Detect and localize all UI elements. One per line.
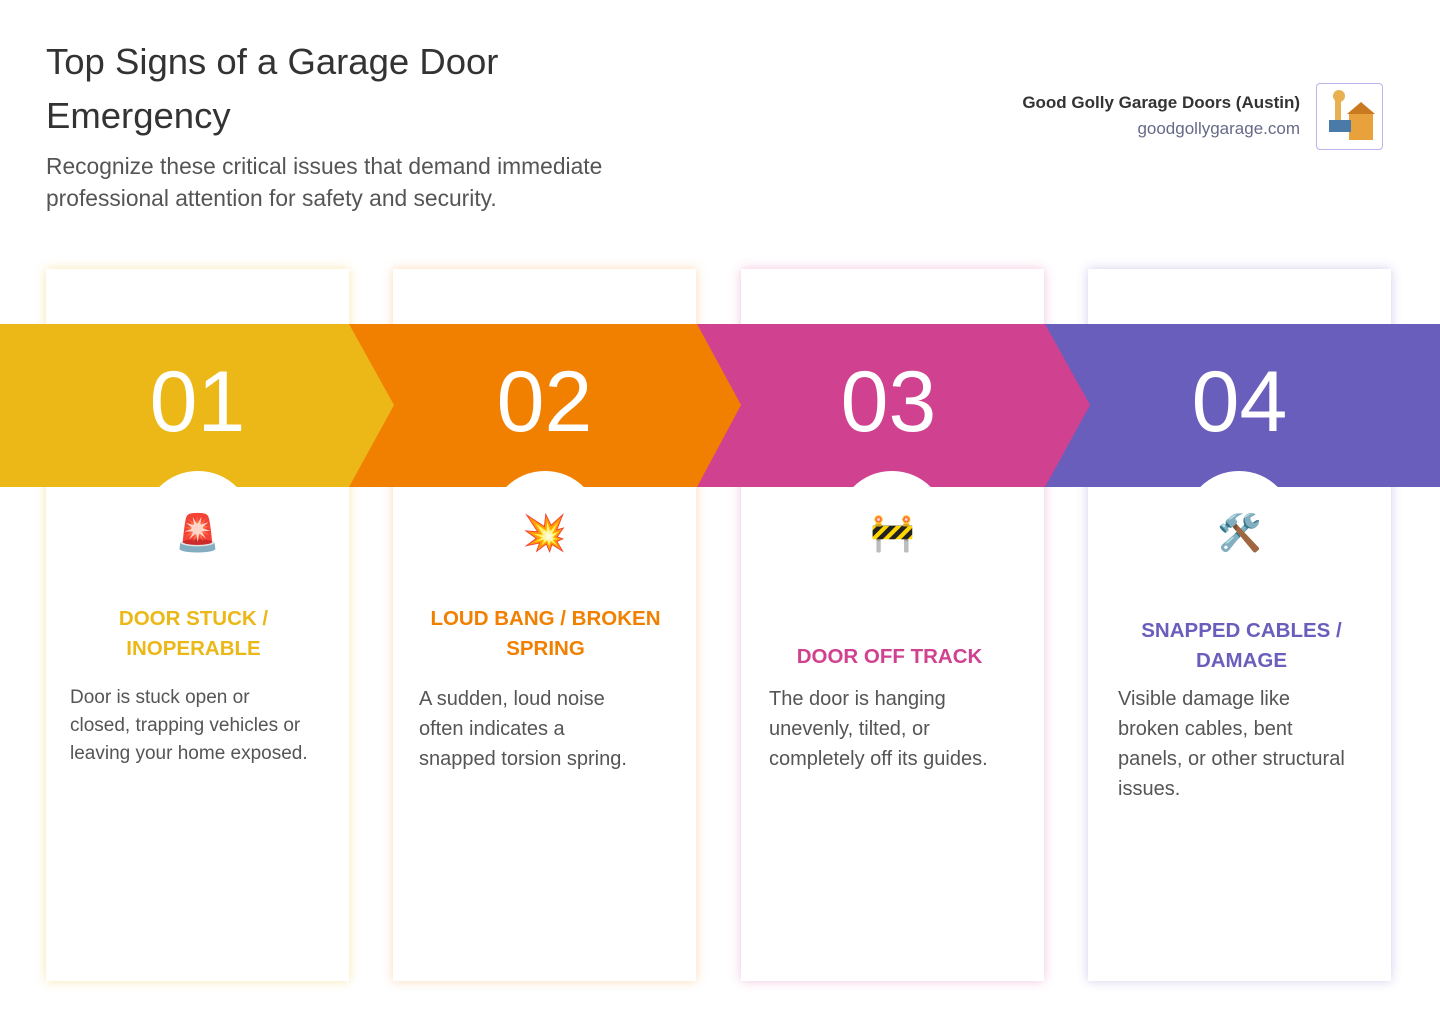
number 04: 04 bbox=[1192, 354, 1287, 450]
card 2 bbox=[393, 269, 696, 981]
card 1 title: DOOR STUCK / bbox=[119, 607, 268, 630]
card 3 bbox=[741, 269, 1044, 981]
card 4 text: broken cables, bent bbox=[1118, 718, 1293, 740]
card 1 text: leaving your home exposed. bbox=[70, 743, 308, 764]
title: Top Signs of a Garage Door Emergency bbox=[46, 41, 498, 136]
brand bbox=[1022, 93, 1300, 138]
card 2 title bbox=[430, 607, 661, 660]
card 4 title: SNAPPED CABLES / bbox=[1141, 619, 1342, 642]
icon: tools: 🛠️ bbox=[1217, 512, 1262, 553]
icon: barrier: 🚧 bbox=[870, 512, 915, 553]
card 3 title: DOOR OFF TRACK bbox=[797, 645, 982, 668]
card 4 text: panels, or other structural bbox=[1118, 748, 1345, 770]
card 2 text: snapped torsion spring. bbox=[419, 748, 627, 770]
circle 1 bbox=[143, 471, 253, 581]
card 1 text bbox=[70, 687, 308, 764]
card 3 text: unevenly, tilted, or bbox=[769, 718, 930, 740]
subtitle: Recognize these critical issues that demand immediate bbox=[46, 153, 602, 179]
card 1 text: closed, trapping vehicles or bbox=[70, 715, 300, 736]
circle 2 bbox=[490, 471, 600, 581]
icon: siren: 🚨 bbox=[175, 512, 220, 553]
card 4 text bbox=[1118, 688, 1345, 800]
number 03: 03 bbox=[841, 354, 936, 450]
card 1 title: INOPERABLE bbox=[126, 637, 261, 660]
circle 3 bbox=[837, 471, 947, 581]
card 2 text bbox=[419, 688, 627, 770]
card 1 title bbox=[119, 607, 268, 660]
card 2 title: SPRING bbox=[506, 637, 585, 660]
number 01: 01 bbox=[150, 354, 245, 450]
card 1 bbox=[46, 269, 349, 981]
card 2 text: often indicates a bbox=[419, 718, 565, 740]
card 3 text bbox=[769, 688, 988, 770]
card 3 text: The door is hanging bbox=[769, 688, 946, 710]
logo bbox=[1316, 83, 1383, 150]
arrow band bbox=[0, 324, 1440, 487]
card 4 title: DAMAGE bbox=[1196, 649, 1287, 672]
brand: goodgollygarage.com bbox=[1137, 119, 1300, 138]
icon: explosion: 💥 bbox=[522, 512, 567, 553]
circle 4 bbox=[1184, 471, 1294, 581]
card 1 text: Door is stuck open or bbox=[70, 687, 250, 708]
subtitle bbox=[46, 153, 602, 211]
number 02: 02 bbox=[497, 354, 592, 450]
card 2 title: LOUD BANG / BROKEN bbox=[430, 607, 661, 630]
card 4 text: issues. bbox=[1118, 778, 1180, 800]
card 3 text: completely off its guides. bbox=[769, 748, 988, 770]
card 2 text: A sudden, loud noise bbox=[419, 688, 605, 710]
card 4 bbox=[1088, 269, 1391, 981]
brand: Good Golly Garage Doors (Austin) bbox=[1022, 93, 1300, 112]
card 4 title bbox=[1141, 619, 1342, 672]
subtitle: professional attention for safety and security. bbox=[46, 185, 497, 211]
card 4 text: Visible damage like bbox=[1118, 688, 1290, 710]
